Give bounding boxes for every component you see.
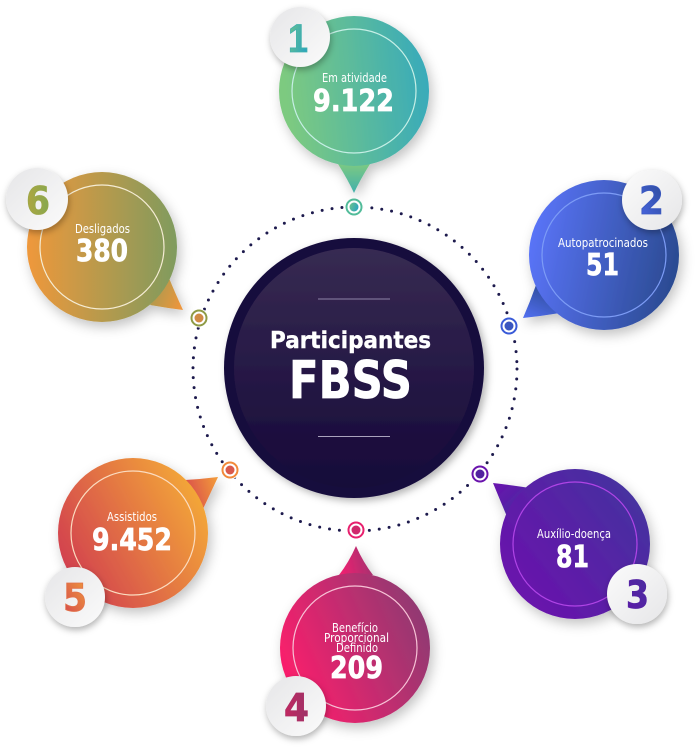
label 5: Assistidos xyxy=(107,510,157,524)
label 1: Em atividade xyxy=(322,71,387,85)
label 4: Definido xyxy=(336,641,378,655)
badge 4 xyxy=(266,676,326,736)
label 4: Benefício xyxy=(332,621,378,635)
badge 3 xyxy=(607,564,667,624)
panel: em atividade xyxy=(270,7,429,193)
panel: beneficio proporcional definido xyxy=(266,546,430,736)
badge 1: 1 xyxy=(288,17,308,61)
badge 6 xyxy=(6,168,68,230)
badge 2 xyxy=(622,170,682,230)
badge 3: 3 xyxy=(626,573,649,617)
bubble 6 xyxy=(27,172,183,322)
inner ring 2 xyxy=(542,193,666,317)
label 4: Proporcional xyxy=(324,631,389,645)
label 3: Auxílio-doença xyxy=(537,527,611,541)
panel: autopatrocinados xyxy=(523,170,682,330)
inner ring 3 xyxy=(513,482,637,606)
ring marker 5 xyxy=(220,460,240,480)
ring marker 1 xyxy=(344,198,364,216)
inner ring 5 xyxy=(71,471,195,595)
panel: desligados xyxy=(6,168,183,322)
bubble 4 xyxy=(280,546,430,723)
value 2: 51 xyxy=(586,248,619,283)
value 1: 9.122 xyxy=(313,84,394,119)
bubble 1 xyxy=(279,16,429,193)
central disc xyxy=(224,238,484,498)
dotted ring xyxy=(193,207,517,531)
center title: Participantes xyxy=(270,326,431,354)
central circle xyxy=(224,238,484,498)
badge 4: 4 xyxy=(284,686,309,730)
label 6: Desligados xyxy=(75,222,130,236)
bubble 3 xyxy=(493,469,650,619)
bubble 5 xyxy=(58,458,218,608)
inner ring 6 xyxy=(40,185,164,309)
inner ring 1 xyxy=(292,29,416,153)
bottom rule xyxy=(318,436,390,437)
panel: assistidos xyxy=(45,458,218,627)
value 4: 209 xyxy=(330,651,383,686)
value 5: 9.452 xyxy=(92,523,172,558)
top rule xyxy=(318,298,390,300)
badge 2: 2 xyxy=(639,179,664,223)
badge 6: 6 xyxy=(26,179,50,223)
bubble 2 xyxy=(523,180,679,330)
ring marker 3 xyxy=(470,464,490,484)
ring marker 6 xyxy=(190,308,208,328)
badge 1 xyxy=(270,7,330,67)
ring marker 2 xyxy=(500,316,518,336)
value 3: 81 xyxy=(556,540,589,575)
badge 5: 5 xyxy=(63,576,87,620)
value 6: 380 xyxy=(76,234,128,269)
label 4 xyxy=(324,621,389,655)
ring marker 4 xyxy=(346,520,366,540)
badge 5 xyxy=(45,567,105,627)
panel: auxilio-doenca xyxy=(493,469,667,624)
label 2: Autopatrocinados xyxy=(558,236,648,250)
center subtitle: FBSS xyxy=(289,351,412,411)
inner ring 4 xyxy=(293,586,417,710)
